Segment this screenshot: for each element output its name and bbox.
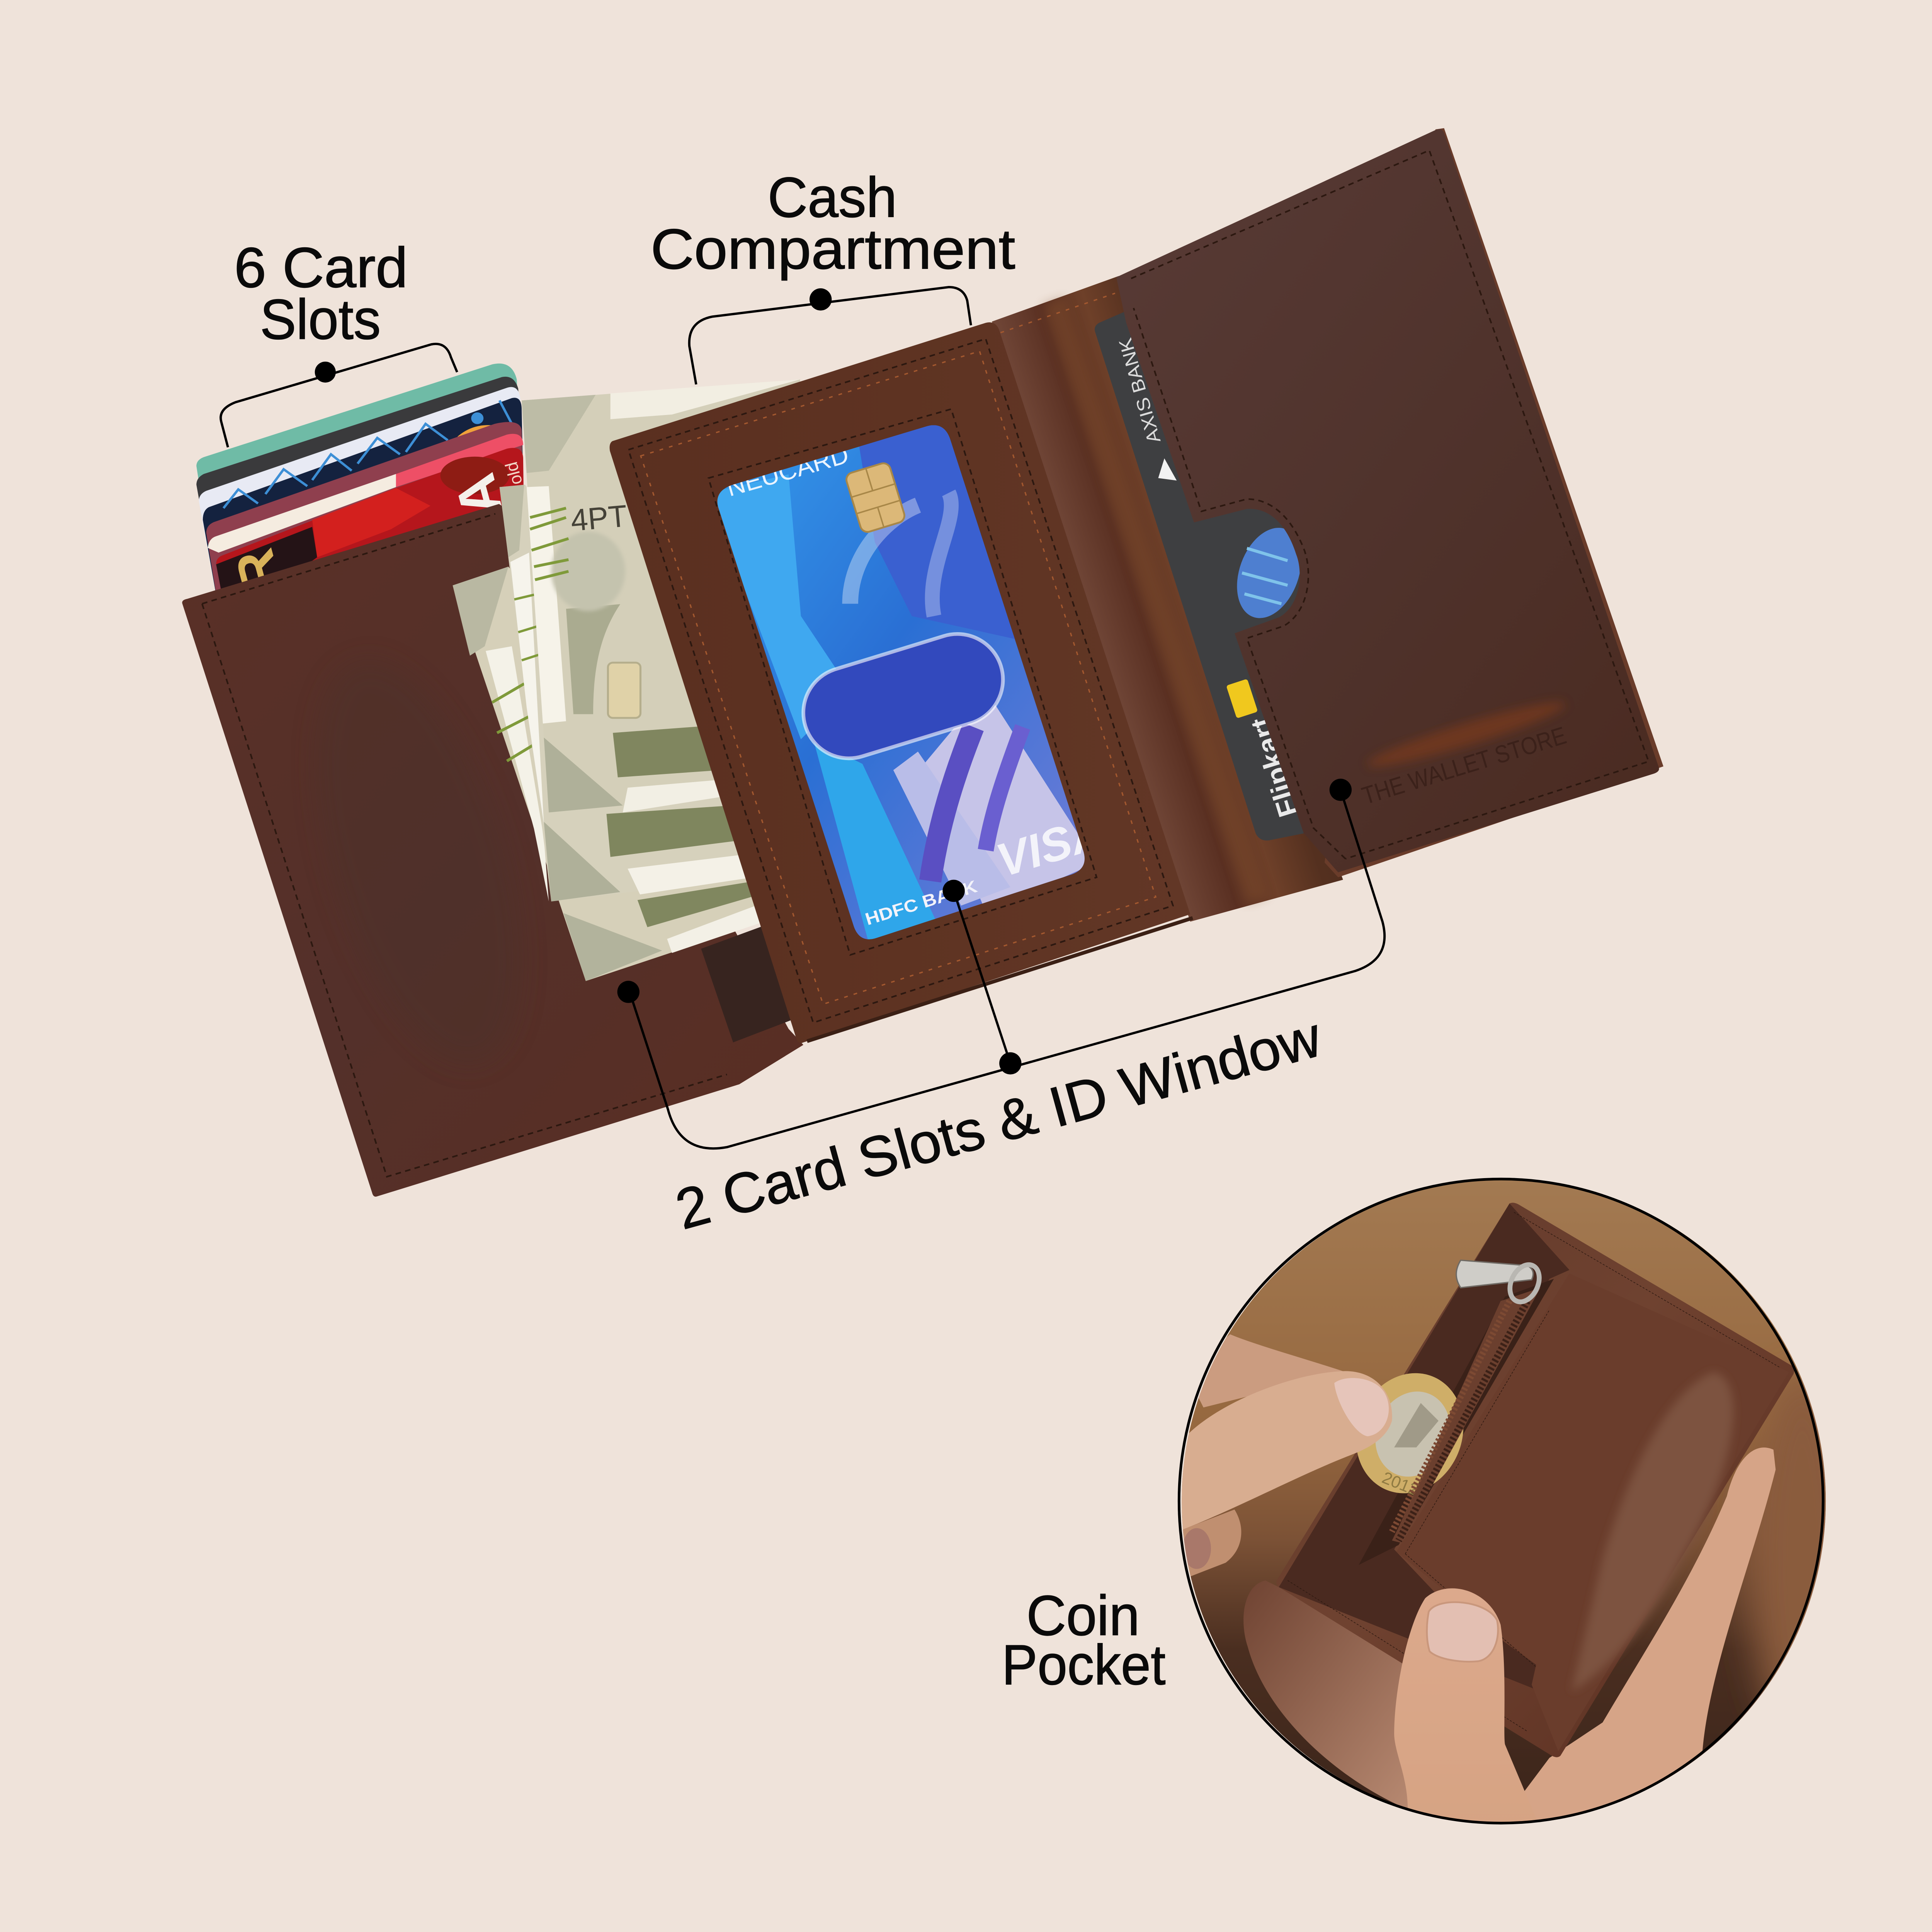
hand: lower left finger — [1243, 1580, 1412, 1811]
card pattern: triangles — [223, 400, 512, 508]
cash notes — [453, 379, 800, 981]
coin: 2012 — [1379, 1468, 1421, 1500]
hand: thumb — [1394, 1588, 1541, 1829]
label: 6 card slots: 6 Card — [234, 236, 408, 299]
connector: 6 card slots bracket — [221, 344, 457, 447]
label: 2 card slots and ID window: 2 Card Slots & ID Window — [669, 1005, 1328, 1242]
card stack: 6 card slots — [196, 364, 524, 609]
label: cash compartment — [651, 166, 1015, 281]
photo: open wallet with cards, cash and ID window — [182, 128, 1663, 1242]
connector: 2 card slots and ID window — [617, 779, 1384, 1148]
left wallet panel — [182, 504, 803, 1197]
hand: right palm — [1523, 1447, 1776, 1825]
zipper pull — [1456, 1260, 1545, 1306]
inset photo: coin pocket — [1177, 1177, 1855, 1833]
fabric pocket strip — [701, 927, 791, 1043]
spine of wallet — [992, 276, 1343, 922]
chip — [845, 461, 906, 534]
ID window with visa card: NEUCARD — [723, 440, 852, 502]
ID panel — [610, 322, 1193, 1043]
hand: rear finger — [1186, 1334, 1345, 1408]
coin — [1338, 1357, 1481, 1510]
label: 6 card slots — [234, 236, 408, 351]
label: coin pocket — [1002, 1584, 1166, 1697]
ID window with visa card: HDFC BANK — [863, 877, 979, 929]
hand: under finger — [1177, 1510, 1241, 1578]
black card in pocket: Axis Bank / Flipkart: AXIS BANK — [1115, 336, 1165, 446]
zipper — [1392, 1288, 1541, 1543]
serial text: 4PT — [569, 498, 629, 537]
card lettering — [223, 460, 526, 597]
card lettering: A — [443, 468, 515, 523]
black card in pocket: Axis Bank / Flipkart — [1095, 265, 1417, 840]
plastic pill window — [801, 632, 1005, 760]
ID window with visa card: VISA — [991, 805, 1111, 887]
note: front with serial 4PT — [522, 379, 800, 813]
embossed brand: THE WALLET STORE — [1359, 721, 1570, 810]
label: cash compartment: Cash — [768, 166, 897, 229]
label: 6 card slots: Slots — [260, 288, 381, 351]
note: lower — [453, 567, 762, 981]
label: coin pocket: Pocket — [1002, 1633, 1166, 1697]
card lettering: old — [502, 460, 526, 487]
table surface — [1177, 1177, 1833, 1833]
connector: cash compartment bracket — [689, 287, 971, 384]
hand: index finger — [1177, 1371, 1392, 1532]
label: cash compartment: Compartment — [651, 218, 1015, 281]
wallet body — [1276, 1203, 1794, 1757]
black card in pocket: Axis Bank / Flipkart: Flipkart — [1244, 714, 1304, 821]
note: middle — [500, 485, 748, 901]
card lettering: R — [223, 543, 292, 597]
label: coin pocket: Coin — [1026, 1584, 1140, 1648]
ID window with visa card — [717, 425, 1085, 939]
circle outline — [1179, 1179, 1823, 1823]
right front panel with thumb notch — [1116, 128, 1663, 877]
